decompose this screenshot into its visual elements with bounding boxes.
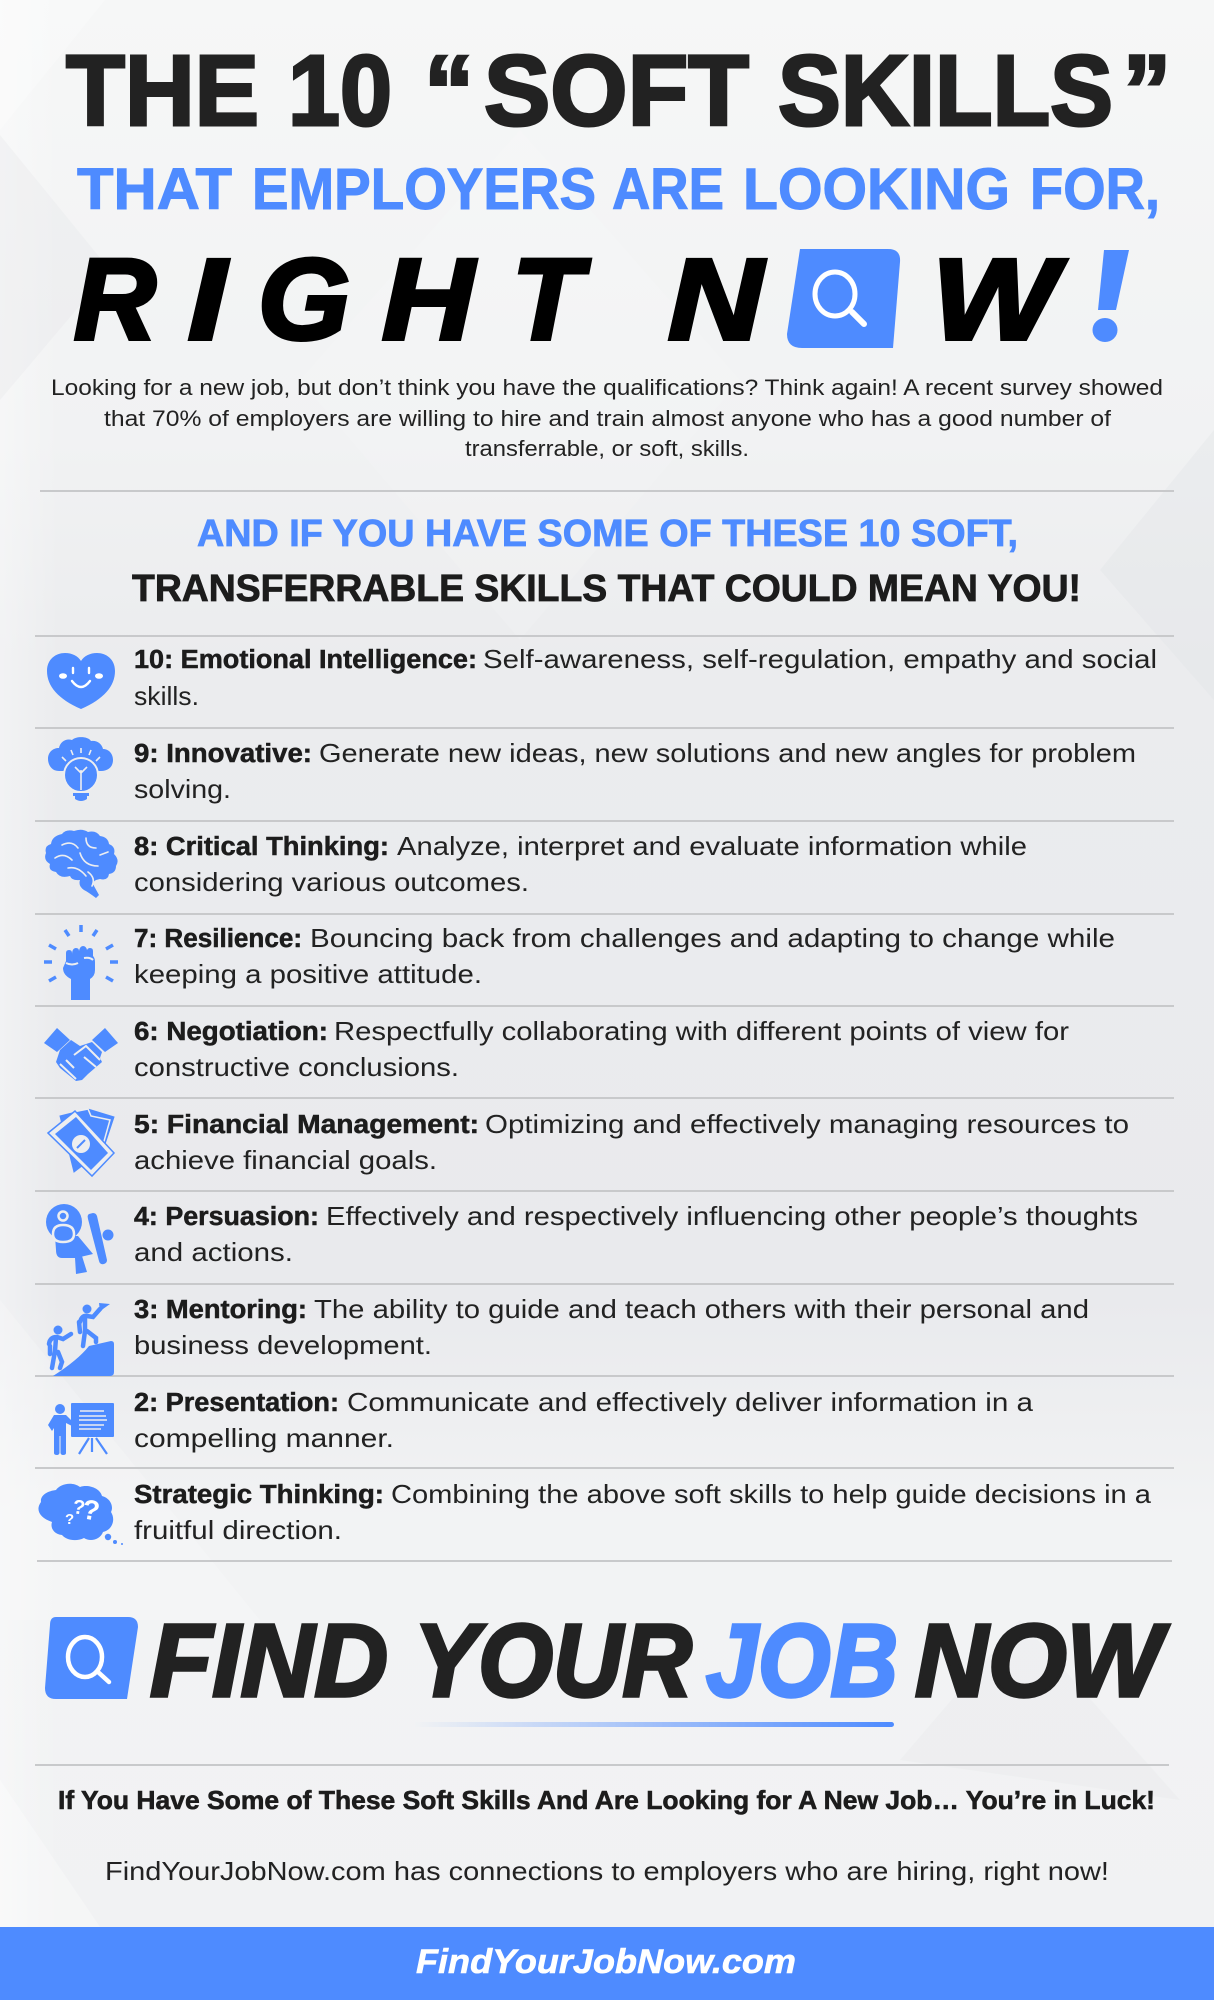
icon: search box	[787, 249, 900, 348]
skill 4: persuasion	[46, 1201, 1138, 1274]
logo: find your job now: NOW	[915, 1603, 1170, 1718]
skill 2: presentation: Communicate and effectively deliver information in a	[347, 1387, 1034, 1417]
intro paragraph: transferrable, or soft, skills.	[465, 436, 749, 461]
skill 1: strategic thinking: Combining the above soft skills to help guide decisions in a	[391, 1479, 1152, 1509]
subtitle	[77, 157, 1160, 222]
intro paragraph: Looking for a new job, but don’t think you have the qualifications? Think again! A recent survey showed	[51, 375, 1163, 400]
headline: right now	[74, 236, 1129, 364]
skill 5: financial management: 5: Financial Management:	[134, 1111, 479, 1139]
skill 2: presentation: compelling manner.	[134, 1423, 394, 1453]
skill 6: negotiation: constructive conclusions.	[134, 1052, 459, 1082]
skill 7: resilience: keeping a positive attitude.	[134, 959, 482, 989]
skill 4: persuasion: Effectively and respectively influencing other people’s thoughts	[326, 1201, 1138, 1231]
subtitle: FOR,	[1030, 157, 1160, 222]
icon: thought cloud: ?	[71, 1496, 86, 1520]
skill 1: strategic thinking: Strategic Thinking:	[134, 1481, 384, 1509]
closing callout: If You Have Some of These Soft Skills And Are Looking for A New Job… You’re in Luck!	[58, 1785, 1155, 1815]
title: SOFT	[484, 35, 749, 147]
footer band	[0, 1927, 1214, 2000]
skill 7: resilience	[44, 923, 1115, 1000]
skill 2: presentation	[48, 1387, 1034, 1455]
icon: thought cloud: ?	[65, 1511, 74, 1528]
icon: thought cloud: ?	[80, 1493, 102, 1527]
logo: find your job now: FIND	[150, 1603, 388, 1718]
skill 3: mentoring	[49, 1294, 1089, 1376]
skill 5: financial management	[48, 1109, 1129, 1176]
icon: lightbulb cloud	[48, 737, 113, 801]
skill 8: critical thinking: 8: Critical Thinking:	[134, 833, 389, 861]
skill 9: innovative: 9: Innovative:	[134, 740, 312, 768]
subtitle: EMPLOYERS	[252, 157, 596, 222]
skill 6: negotiation: 6: Negotiation:	[134, 1018, 328, 1046]
icon: handshake	[44, 1028, 118, 1081]
title: SKILLS	[778, 35, 1113, 147]
headline: right now: W	[932, 236, 1067, 364]
skill 10: emotional intelligence	[47, 644, 1157, 711]
title: ”	[1123, 35, 1171, 147]
footer band: FindYourJobNow.com	[416, 1943, 796, 1981]
logo: find your job now	[45, 1603, 1170, 1718]
subtitle: LOOKING	[743, 157, 1010, 222]
closing text: FindYourJobNow.com has connections to employers who are hiring, right now!	[105, 1856, 1109, 1886]
skill 1: strategic thinking: fruitful direction.	[134, 1515, 342, 1545]
skill 8: critical thinking: Analyze, interpret and evaluate information while	[397, 831, 1027, 861]
skill 7: resilience: 7: Resilience:	[134, 925, 302, 953]
headline: right now: N	[668, 236, 766, 364]
icon: heart	[47, 653, 115, 709]
skill 3: mentoring: The ability to guide and teach others with their personal and	[314, 1294, 1089, 1324]
underline accent	[414, 1722, 894, 1727]
exclamation mark	[1092, 250, 1129, 342]
icon: brain	[45, 830, 118, 898]
icon: person with megaphone	[46, 1204, 114, 1274]
skill 4: persuasion: and actions.	[134, 1237, 293, 1267]
intro paragraph	[51, 375, 1163, 461]
skill 4: persuasion: 4: Persuasion:	[134, 1203, 319, 1231]
skill 9: innovative: Generate new ideas, new solutions and new angles for problem	[319, 738, 1136, 768]
headline: right now: H	[382, 236, 477, 364]
section heading: TRANSFERRABLE SKILLS THAT COULD MEAN YOU!	[132, 568, 1081, 610]
logo: find your job now: JOB	[706, 1603, 898, 1718]
icon: raised fist	[44, 925, 118, 1000]
skill 6: negotiation	[44, 1016, 1069, 1082]
subtitle: ARE	[612, 157, 724, 222]
skill 7: resilience: Bouncing back from challenges and adapting to change while	[310, 923, 1115, 953]
subtitle: THAT	[77, 157, 232, 222]
title: 10	[288, 35, 392, 147]
skill 1: strategic thinking	[38, 1479, 1152, 1545]
icon: thought cloud	[38, 1484, 123, 1545]
title	[66, 35, 1171, 147]
title: THE	[66, 35, 259, 147]
logo: find your job now: YOUR	[414, 1603, 692, 1718]
headline: right now: R	[74, 236, 156, 364]
skill 3: mentoring: business development.	[134, 1330, 432, 1360]
skill 9: innovative: solving.	[134, 774, 231, 804]
section heading	[132, 513, 1081, 610]
title: “	[424, 35, 474, 147]
skill 5: financial management: achieve financial goals.	[134, 1145, 437, 1175]
skill 2: presentation: 2: Presentation:	[134, 1389, 339, 1417]
icon: presenter and board	[48, 1403, 114, 1455]
skill 8: critical thinking: considering various outcomes.	[134, 867, 529, 897]
icon: money bills	[48, 1109, 114, 1176]
icon: climbers on a hill	[49, 1303, 114, 1376]
headline: right now: I	[188, 236, 228, 364]
skill 9: innovative	[48, 737, 1136, 804]
skill 5: financial management: Optimizing and effectively managing resources to	[485, 1109, 1129, 1139]
skill 10: emotional intelligence: Self-awareness, self-regulation, empathy and social	[483, 644, 1157, 674]
skill 10: emotional intelligence: skills.	[134, 681, 199, 711]
icon: search box	[45, 1617, 138, 1699]
skill 6: negotiation: Respectfully collaborating with different points of view for	[334, 1016, 1069, 1046]
headline: right now: G	[258, 236, 350, 364]
intro paragraph: that 70% of employers are willing to hire and train almost anyone who has a good number of	[104, 406, 1112, 431]
section heading: AND IF YOU HAVE SOME OF THESE 10 SOFT,	[197, 513, 1018, 555]
skill 3: mentoring: 3: Mentoring:	[134, 1296, 307, 1324]
skill 8: critical thinking	[45, 830, 1027, 898]
skill 10: emotional intelligence: 10: Emotional Intelligence:	[134, 646, 477, 674]
headline: right now: T	[512, 236, 591, 364]
